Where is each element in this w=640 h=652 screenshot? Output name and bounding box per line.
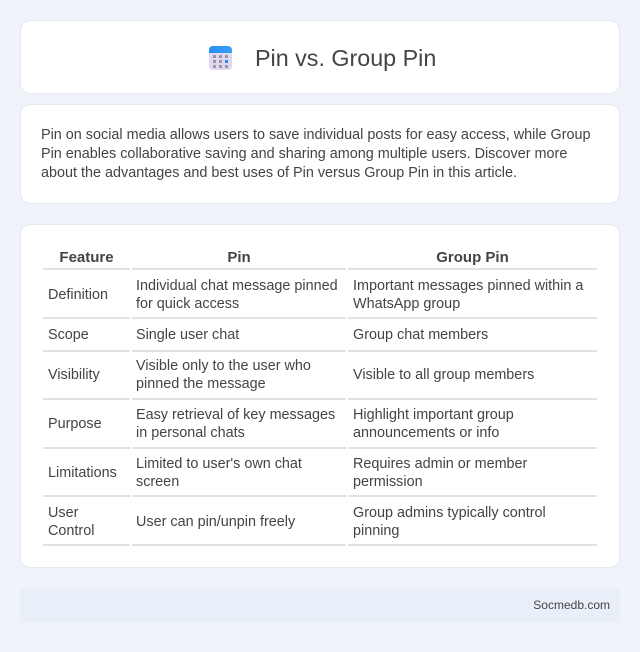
table card — [20, 224, 620, 568]
intro card — [20, 104, 620, 204]
comparison table: Highlight important group — [353, 407, 514, 423]
comparison table: Single user chat — [136, 327, 239, 343]
footer text: Socmedb.com — [533, 598, 610, 612]
comparison table: Group admins typically control — [353, 505, 546, 521]
header: Feature: Feature — [59, 249, 114, 266]
header: Pin: Pin — [227, 249, 251, 266]
row: Definition: Definition — [48, 287, 108, 303]
comparison table: Individual chat message pinned — [136, 278, 338, 294]
comparison table: permission — [353, 474, 423, 490]
row: Visibility: Visibility — [48, 367, 100, 383]
title: Pin vs. Group Pin — [255, 45, 436, 71]
footer bar — [20, 588, 620, 622]
comparison table: Requires admin or member — [353, 456, 527, 472]
title card — [20, 20, 620, 94]
comparison table: Group chat members — [353, 327, 488, 343]
comparison table: User can pin/unpin freely — [136, 514, 295, 530]
comparison table: pinning — [353, 523, 399, 539]
comparison table: for quick access — [136, 296, 239, 312]
intro text: about the advantages and best uses of Pin versus Group Pin in this article. — [41, 165, 517, 181]
comparison table: in personal chats — [136, 425, 245, 441]
header: Group Pin: Group Pin — [436, 249, 509, 266]
row: Purpose: Purpose — [48, 416, 102, 432]
row: User Control: Control — [48, 523, 94, 539]
intro text: Pin enables collaborative saving and sharing among multiple users. Discover more — [41, 146, 567, 162]
row: Scope: Scope — [48, 327, 89, 343]
comparison table: Easy retrieval of key messages — [136, 407, 335, 423]
row: User Control — [48, 505, 94, 539]
row: Limitations: Limitations — [48, 465, 117, 481]
comparison table: Visible to all group members — [353, 367, 534, 383]
row: User Control: User — [48, 505, 78, 521]
comparison table: pinned the message — [136, 376, 266, 392]
comparison table: Visible only to the user who — [136, 358, 311, 374]
comparison table: Important messages pinned within a — [353, 278, 583, 294]
intro text — [41, 127, 591, 181]
comparison table: Limited to user's own chat — [136, 456, 302, 472]
comparison table: screen — [136, 474, 179, 490]
intro text: Pin on social media allows users to save individual posts for easy access, while Group — [41, 127, 591, 143]
comparison table: announcements or info — [353, 425, 499, 441]
icon: calendar — [209, 46, 232, 70]
comparison table: WhatsApp group — [353, 296, 460, 312]
